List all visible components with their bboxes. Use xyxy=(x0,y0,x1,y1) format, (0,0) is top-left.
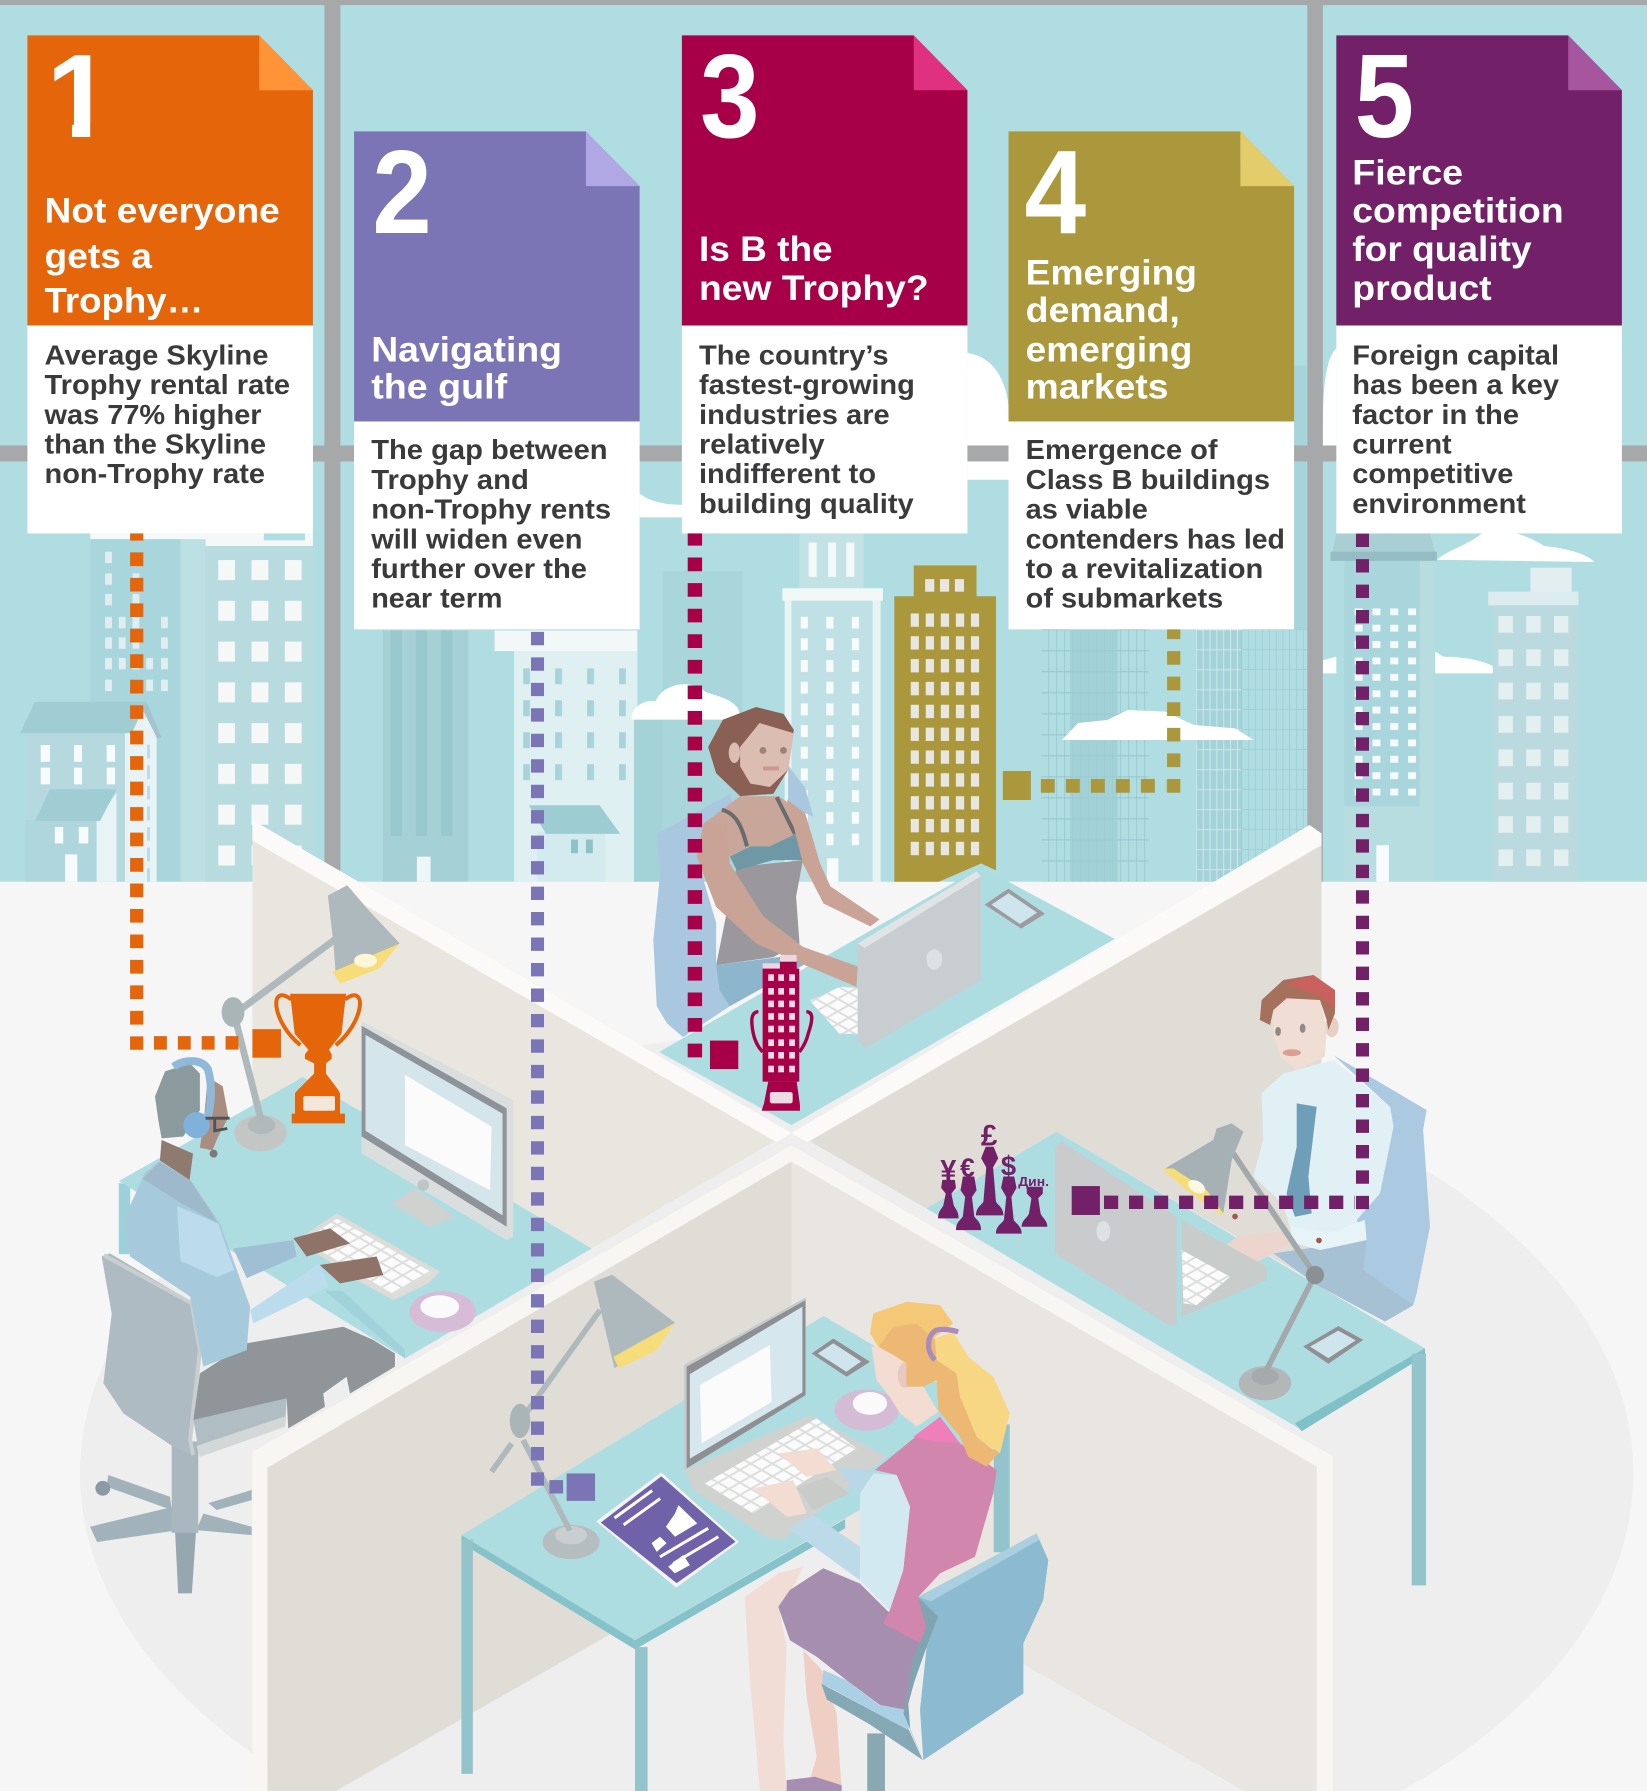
chair back xyxy=(903,1533,1048,1760)
card 5 body text: current xyxy=(1352,428,1452,459)
card 2 body text: near term xyxy=(371,583,503,614)
building: glass towers xyxy=(1041,366,1307,882)
building: left tall tower xyxy=(206,533,313,882)
cubicle wall: back right xyxy=(792,825,1321,1286)
card 5 heading: competition xyxy=(1352,190,1564,230)
neck and head xyxy=(155,1061,230,1180)
card 2 header xyxy=(354,131,640,421)
building: tall band right of pale tower xyxy=(634,571,742,882)
head xyxy=(1260,975,1339,1070)
icon: currency chess pieces: $ xyxy=(1001,1150,1016,1181)
desk xyxy=(926,1132,1425,1430)
card 2 heading xyxy=(371,330,562,407)
tie xyxy=(1287,1103,1317,1217)
hands xyxy=(293,1228,383,1283)
chair xyxy=(653,765,813,1037)
laptop xyxy=(1055,1142,1267,1325)
card 3 body text: building quality xyxy=(699,488,914,519)
card 1: Not everyone gets a Trophy xyxy=(27,30,313,533)
card 5 body text: Foreign capital xyxy=(1352,339,1559,370)
clouds on right xyxy=(1323,348,1594,673)
card 1 body text: Average Skyline xyxy=(45,339,268,370)
card 3 body text: The country’s xyxy=(699,339,889,370)
card 4 fold xyxy=(1240,131,1294,186)
cloud xyxy=(632,684,742,720)
icon: currency chess pieces xyxy=(938,1120,1049,1234)
card 1 body text: Trophy rental rate xyxy=(45,369,290,400)
card 3 heading: Is B the xyxy=(699,229,833,269)
building: striped mid tower xyxy=(383,631,468,882)
lamp xyxy=(222,885,400,1151)
card 5 body text: competitive xyxy=(1352,458,1513,489)
cloud over glass towers xyxy=(1062,710,1254,740)
card 5 heading: product xyxy=(1352,268,1492,308)
card 2 body text: will widen even xyxy=(370,523,583,554)
card 5 body text: has been a key xyxy=(1352,369,1560,400)
card 4 heading: demand, xyxy=(1026,290,1180,330)
workstation: man at right desk xyxy=(926,975,1430,1585)
chest xyxy=(704,796,805,857)
trousers xyxy=(193,1327,395,1428)
cloud behind cards xyxy=(640,353,1010,517)
pink top xyxy=(875,1417,997,1647)
floor shadow ellipse xyxy=(80,1028,1633,1791)
keyboard xyxy=(297,1213,440,1300)
card 4 body panel xyxy=(1009,421,1294,629)
card 5 header xyxy=(1336,35,1622,326)
card 5 body text xyxy=(1352,339,1560,519)
laptop xyxy=(684,1298,887,1540)
mouse pad xyxy=(410,1291,476,1332)
card 1 number: 1 xyxy=(46,30,112,163)
icon: orange trophy xyxy=(276,994,360,1123)
card 5 heading xyxy=(1352,152,1564,308)
phone xyxy=(985,889,1045,929)
chair stem and seat xyxy=(821,1670,923,1791)
card 3 body text: industries are xyxy=(699,399,890,430)
card 5: Fierce competition for quality product xyxy=(1336,30,1622,533)
card 5 heading: for quality xyxy=(1352,229,1532,269)
icon: building trophy xyxy=(752,955,812,1111)
card 3 body text: indifferent to xyxy=(699,458,876,489)
mouse pad xyxy=(835,1390,899,1431)
city skyline xyxy=(20,348,1594,883)
card 5 fold xyxy=(1568,35,1622,90)
connector: 3 crimson dashed line xyxy=(695,532,738,1069)
card 5 heading: Fierce xyxy=(1352,152,1463,192)
card 1 heading: gets a xyxy=(45,236,152,276)
building: right tower with cap xyxy=(1331,533,1437,882)
card 4 heading xyxy=(1026,252,1197,407)
card 4 body text: of submarkets xyxy=(1026,583,1223,614)
card 4 body text: contenders has led xyxy=(1026,523,1285,554)
legs xyxy=(745,1567,842,1791)
window frame xyxy=(0,0,1647,882)
card 1 body text: than the Skyline xyxy=(45,428,266,459)
lower body xyxy=(1273,1240,1413,1322)
card 2 body panel xyxy=(354,421,640,629)
houses xyxy=(20,702,162,882)
card 2: Navigating the gulf xyxy=(354,126,640,629)
card 4: Emerging demand, emerging markets xyxy=(1009,126,1294,629)
jeans xyxy=(716,954,824,1006)
chair xyxy=(1320,1055,1430,1322)
card 2 heading: Navigating xyxy=(371,330,562,370)
card 3: Is B the new Trophy xyxy=(682,30,967,533)
card 3 fold xyxy=(914,35,967,90)
floor xyxy=(0,882,1647,1791)
card 5 body text: factor in the xyxy=(1352,399,1519,430)
shirt xyxy=(125,1162,328,1367)
card 5 body panel xyxy=(1336,326,1622,533)
card 1 body text: was 77% higher xyxy=(44,399,262,430)
connector: 1 orange dashed line xyxy=(137,527,281,1058)
card 1 body text: non-Trophy rate xyxy=(45,458,265,489)
workstation: man with headset xyxy=(90,885,592,1593)
card 4 header xyxy=(1009,131,1294,421)
card 1 heading xyxy=(45,191,280,321)
building: pale tower xyxy=(495,631,637,882)
building: highlighted olive tower xyxy=(894,565,996,883)
card 4 number: 4 xyxy=(1025,126,1086,259)
monitor xyxy=(362,1021,513,1240)
workstation: woman at front desk xyxy=(461,1275,1048,1791)
card 2 heading: the gulf xyxy=(371,367,507,407)
card 4 body text: Emergence of xyxy=(1026,434,1218,465)
skirt xyxy=(778,1568,927,1710)
card 3 body panel xyxy=(682,326,967,533)
phone xyxy=(812,1338,870,1377)
cubicle wall: back left xyxy=(252,820,792,1358)
desk xyxy=(659,867,1115,1125)
card 3 heading: new Trophy? xyxy=(699,268,929,308)
arms xyxy=(697,800,879,987)
chair xyxy=(90,1253,287,1593)
card 2 number: 2 xyxy=(372,126,432,259)
cubicle wall: front left xyxy=(252,1146,792,1791)
card 4 body text: to a revitalization xyxy=(1026,553,1263,584)
card 3 header xyxy=(682,35,967,326)
desk xyxy=(461,1316,1010,1791)
building: white tower behind woman xyxy=(782,531,883,882)
card 2 fold xyxy=(586,131,640,186)
small house xyxy=(529,805,620,882)
card 1 body panel xyxy=(27,326,313,533)
card 4 heading: markets xyxy=(1026,367,1168,407)
icon: currency chess pieces: £ xyxy=(981,1120,998,1153)
cubicle wall: front right xyxy=(792,1146,1333,1791)
desk xyxy=(119,1183,130,1254)
sleeve and arm xyxy=(788,1467,910,1610)
head xyxy=(708,707,794,796)
icon: currency chess pieces: € xyxy=(960,1152,975,1182)
icon: report document xyxy=(596,1472,739,1588)
building: far right tower xyxy=(1488,568,1578,882)
card 2 body text xyxy=(370,434,611,614)
phone xyxy=(1303,1326,1363,1364)
card 4 body text: Class B buildings xyxy=(1026,464,1270,495)
card 3 number: 3 xyxy=(700,30,760,163)
building: left mid tower xyxy=(90,533,207,882)
connector: 2 purple dashed line xyxy=(538,632,595,1501)
card 2 body text: The gap between xyxy=(371,434,608,465)
card 1 header xyxy=(27,35,313,326)
forearm and hand xyxy=(1217,1214,1367,1270)
connector: 5 violet dashed line xyxy=(1072,508,1362,1215)
card 1 body text xyxy=(44,339,290,489)
card 2 body text: Trophy and xyxy=(371,464,529,495)
laptop xyxy=(810,872,981,1049)
card 2 body text: further over the xyxy=(371,553,587,584)
shirt xyxy=(1253,1060,1393,1250)
top xyxy=(716,797,803,965)
hair and face xyxy=(870,1302,1010,1467)
card 3 heading xyxy=(699,229,929,308)
card 3 body text: relatively xyxy=(699,428,825,459)
lamp xyxy=(492,1275,675,1559)
card 1 fold xyxy=(259,35,313,90)
card 2 body text: non-Trophy rents xyxy=(371,494,611,525)
card 4 body text xyxy=(1026,434,1285,614)
card 3 body text: fastest-growing xyxy=(699,369,915,400)
card 4 body text: as viable xyxy=(1026,494,1148,525)
card 5 body text: environment xyxy=(1352,488,1526,519)
card 3 body text xyxy=(699,339,915,519)
lamp xyxy=(1162,1123,1324,1400)
card 5 number: 5 xyxy=(1355,30,1414,163)
window sky background xyxy=(0,0,1647,882)
hands xyxy=(753,1448,837,1517)
icon: currency chess pieces: Дин. xyxy=(1018,1174,1049,1189)
icon: currency chess pieces: ¥ xyxy=(940,1155,956,1187)
workstation: woman at back desk xyxy=(653,707,1115,1125)
card 1 heading: Not everyone xyxy=(45,191,280,231)
card 1 heading: Trophy… xyxy=(45,281,203,321)
card 4 heading: Emerging xyxy=(1026,252,1197,292)
connector: 4 olive dashed line xyxy=(1003,625,1174,800)
card 4 heading: emerging xyxy=(1026,330,1192,370)
